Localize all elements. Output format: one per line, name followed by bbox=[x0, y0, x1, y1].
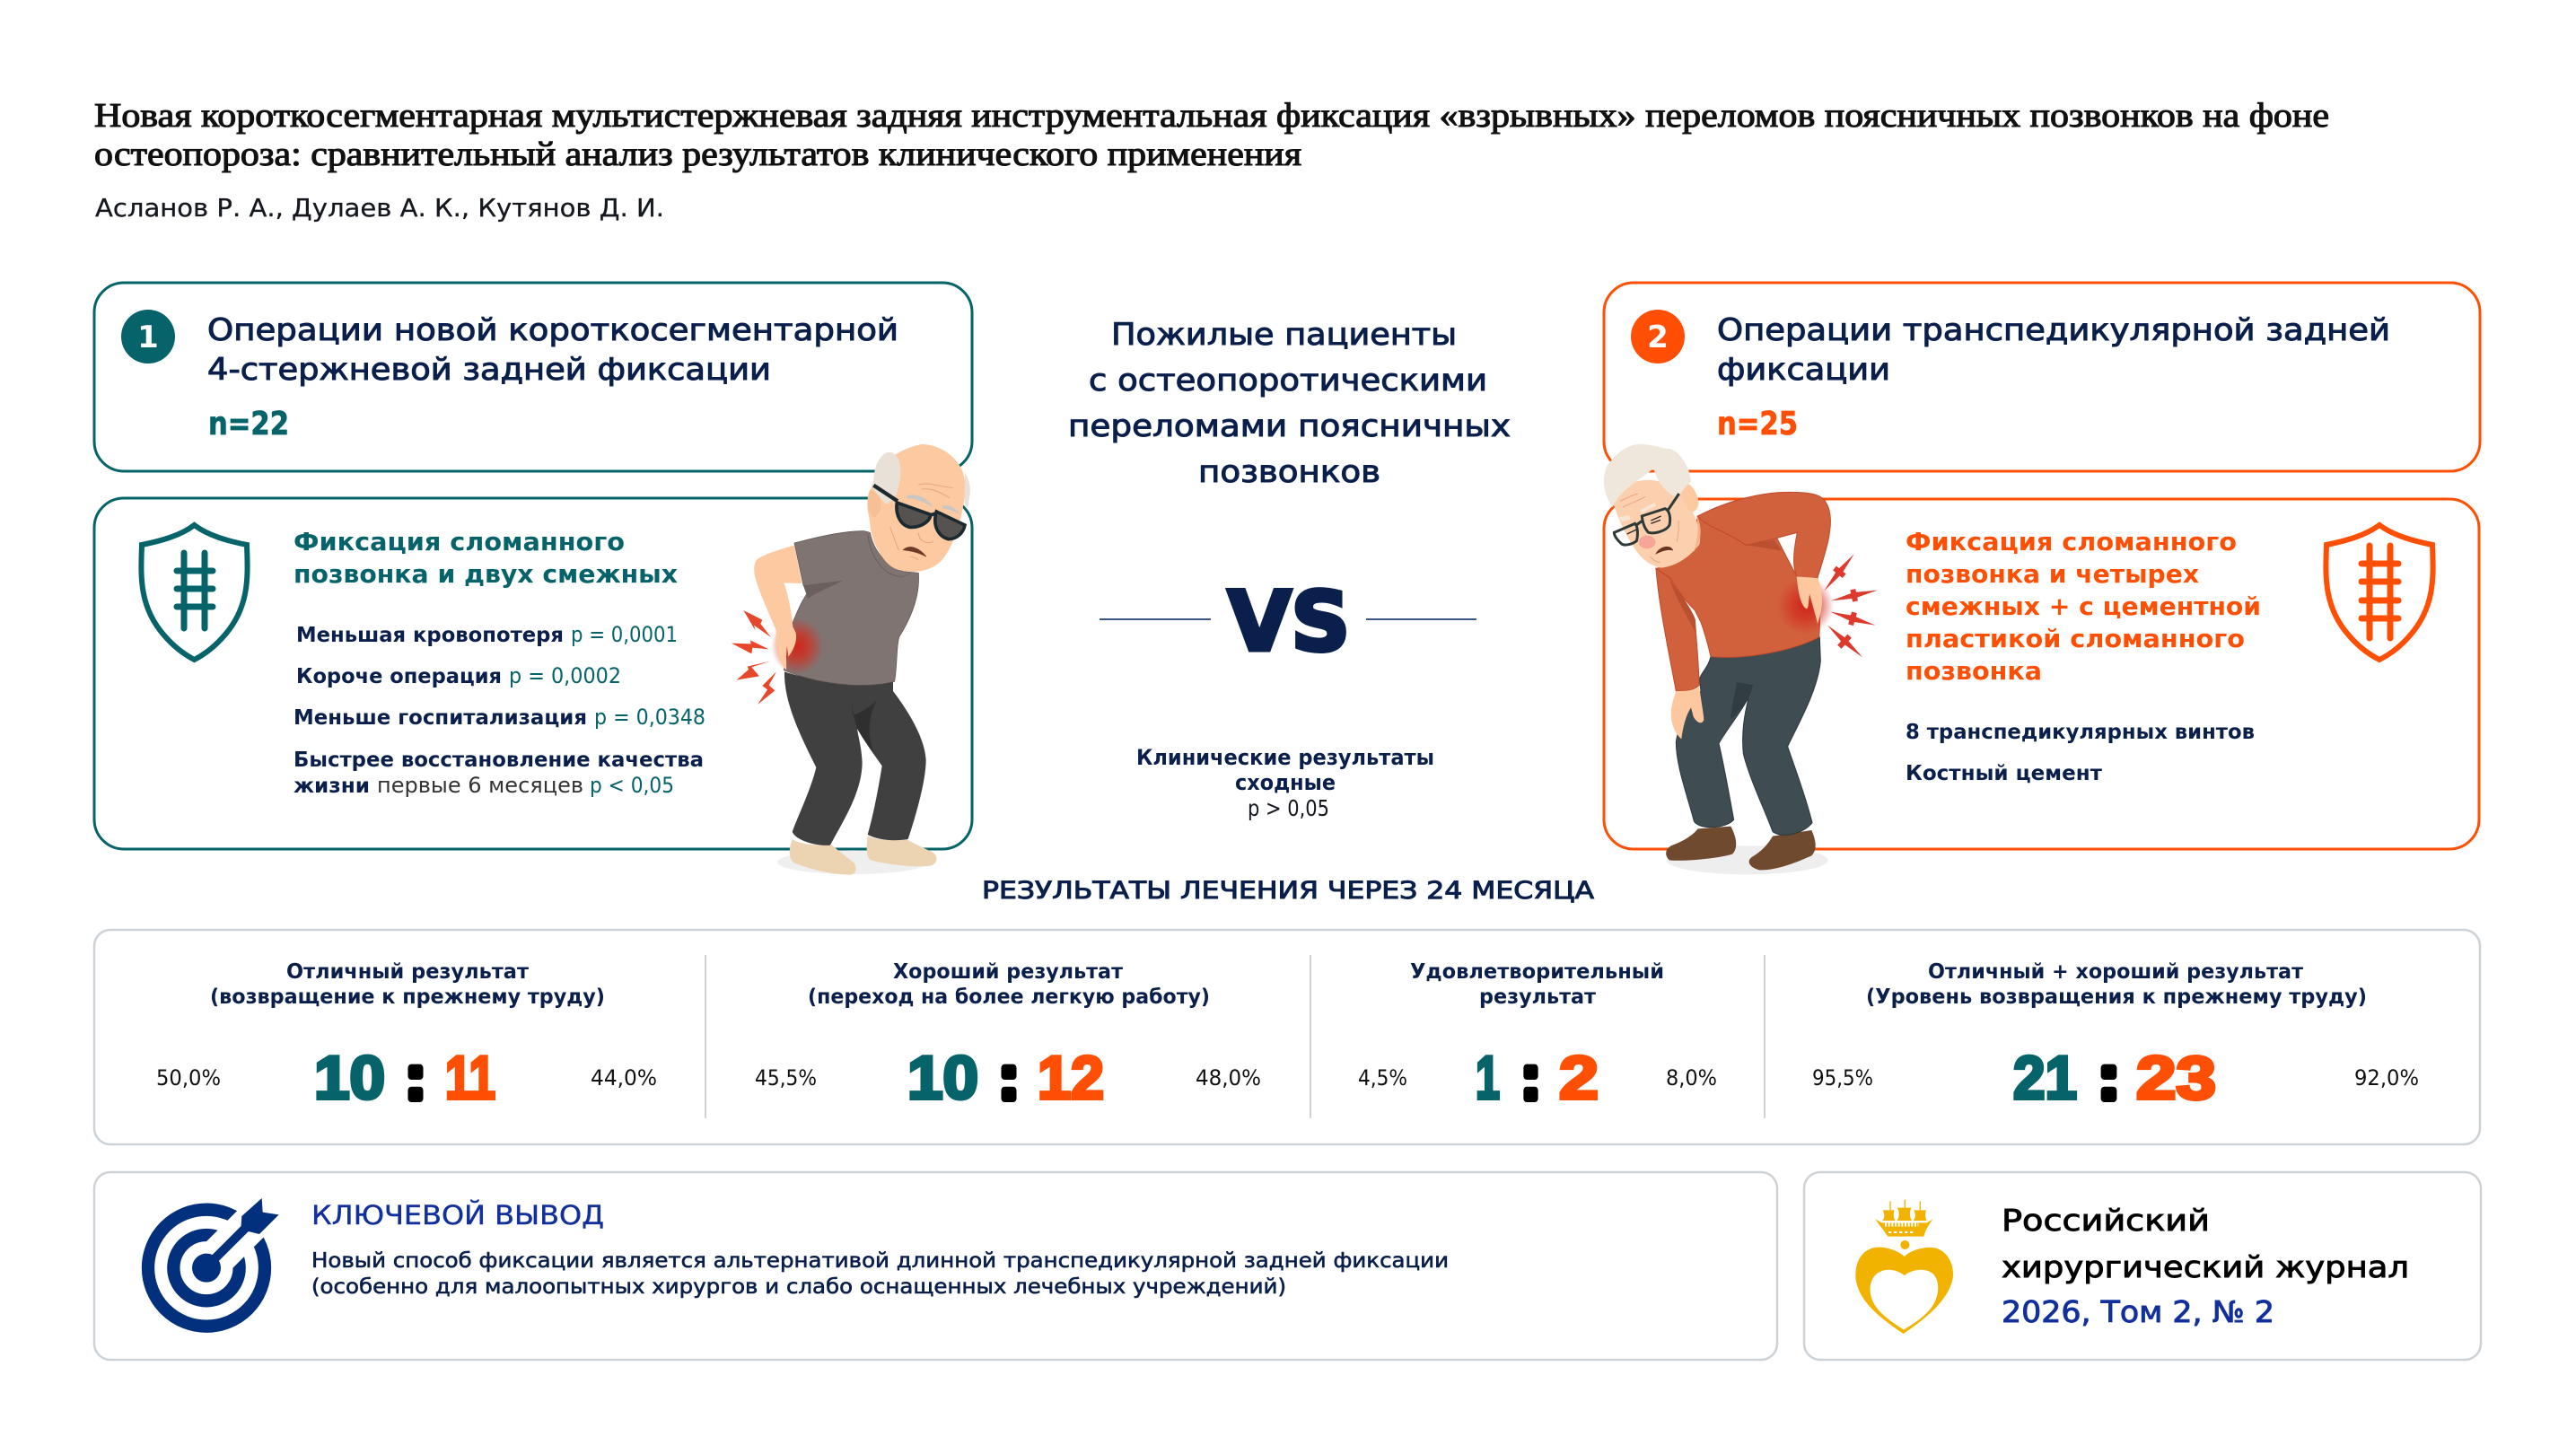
result: excellent plus good bbox=[1812, 960, 2419, 1112]
result: satisfactory: : bbox=[1521, 1044, 1540, 1112]
list: advantages: первые 6 месяцев bbox=[377, 773, 583, 798]
result: good: 48,0% bbox=[1196, 1065, 1261, 1090]
heading: group 1: 4-стержневой задней фиксации bbox=[207, 352, 771, 388]
text: conclusion: Новый способ фиксации является альтернативой длинной транспедикулярной задней фиксации bbox=[311, 1249, 1449, 1273]
logo: ship crown and golden heart bbox=[1855, 1200, 1953, 1334]
icon: teal shield with ladder bbox=[141, 525, 248, 660]
list: components: 8 транспедикулярных винтов bbox=[1906, 721, 2255, 744]
section heading: results: РЕЗУЛЬТАТЫ ЛЕЧЕНИЯ ЧЕРЕЗ 24 МЕСЯЦА bbox=[982, 877, 1595, 905]
result: good: 45,5% bbox=[755, 1065, 817, 1090]
heading: group 2 bbox=[1717, 312, 2390, 388]
result: excellent plus good: 95,5% bbox=[1812, 1065, 1873, 1090]
heading: fixation type 2: пластикой сломанного bbox=[1906, 624, 2245, 653]
result: satisfactory: 4,5% bbox=[1358, 1065, 1407, 1090]
result: satisfactory: 8,0% bbox=[1666, 1065, 1717, 1090]
center note: clinical results: сходные bbox=[1235, 770, 1336, 795]
result: good: 12 bbox=[1038, 1044, 1104, 1112]
result: excellent plus good: 23 bbox=[2136, 1044, 2216, 1112]
result: good: Хороший результат bbox=[893, 960, 1124, 984]
journal name and issue: 2026, Том 2, № 2 bbox=[2002, 1294, 2274, 1329]
sample size group 2: n=25 bbox=[1717, 406, 1798, 442]
panel: group 2 details bbox=[1604, 499, 2479, 849]
center block: patients: с остеопоротическими bbox=[1089, 363, 1487, 399]
journal name and issue bbox=[2002, 1203, 2409, 1329]
text: conclusion bbox=[311, 1249, 1449, 1299]
result: excellent: Отличный результат bbox=[286, 960, 530, 984]
icon: target with arrow bbox=[148, 1193, 281, 1327]
badge: number 2: 2 bbox=[1647, 320, 1669, 355]
center block: patients bbox=[1068, 317, 1511, 490]
heading: group 2: Операции транспедикулярной задней bbox=[1717, 312, 2390, 348]
badge: number 1: 1 bbox=[137, 320, 159, 355]
center block: patients: позвонков bbox=[1198, 454, 1380, 490]
heading: group 1: Операции новой короткосегментарной bbox=[207, 312, 898, 348]
journal name and issue: Российский bbox=[2002, 1203, 2210, 1238]
center block: patients: переломами поясничных bbox=[1068, 408, 1511, 444]
result: excellent plus good: Отличный + хороший результат bbox=[1928, 960, 2304, 984]
heading: fixation type 1: позвонка и двух смежных bbox=[294, 559, 678, 589]
heading: fixation type 2 bbox=[1906, 527, 2261, 686]
text: conclusion: (особенно для малоопытных хирургов и слабо оснащенных лечебных учреждений) bbox=[311, 1275, 1286, 1299]
journal name and issue: хирургический журнал bbox=[2002, 1249, 2409, 1284]
sample size group 1: n=22 bbox=[208, 406, 289, 442]
VS divider: VS bbox=[1228, 575, 1350, 670]
result: satisfactory: 1 bbox=[1476, 1044, 1500, 1112]
list: advantages bbox=[294, 622, 705, 798]
title: остеопороза: сравнительный анализ результатов клинического применения bbox=[94, 136, 1301, 173]
panel: key conclusion bbox=[94, 1172, 1777, 1360]
result: excellent: 44,0% bbox=[591, 1065, 657, 1090]
result: excellent: 10 bbox=[314, 1044, 385, 1112]
list: advantages: Меньшая кровопотеря bbox=[296, 624, 564, 647]
heading: fixation type 2: позвонка bbox=[1906, 656, 2042, 686]
result: excellent bbox=[156, 960, 657, 1112]
result: excellent plus good: : bbox=[2098, 1044, 2119, 1112]
heading: fixation type 2: позвонка и четырех bbox=[1906, 559, 2199, 589]
heading: key conclusion: КЛЮЧЕВОЙ ВЫВОД bbox=[311, 1200, 604, 1231]
list: components bbox=[1906, 721, 2255, 785]
icon: orange shield with ladder bbox=[2326, 525, 2433, 660]
result: excellent: : bbox=[406, 1044, 425, 1112]
list: advantages: Меньше госпитализация bbox=[294, 706, 587, 730]
title bbox=[94, 97, 2329, 173]
list: advantages: Быстрее восстановление качества bbox=[294, 749, 704, 772]
result: excellent: 50,0% bbox=[156, 1065, 221, 1090]
badge: number 1 bbox=[121, 310, 175, 364]
list: advantages: Короче операция bbox=[296, 665, 502, 688]
list: advantages: p = 0,0348 bbox=[594, 705, 705, 730]
center note: clinical results: Клинические результаты bbox=[1136, 745, 1434, 770]
result: excellent: 11 bbox=[445, 1044, 495, 1112]
illustration: elderly man with sunglasses and back pain bbox=[732, 444, 970, 875]
panel: treatment results bbox=[94, 930, 2480, 1144]
result: excellent plus good: 92,0% bbox=[2354, 1065, 2419, 1090]
heading: fixation type 1 bbox=[294, 527, 678, 589]
authors: Асланов Р. А., Дулаев А. К., Кутянов Д. И. bbox=[95, 193, 664, 223]
result: satisfactory: 2 bbox=[1559, 1044, 1599, 1112]
result: good bbox=[755, 960, 1261, 1112]
list: advantages: p = 0,0001 bbox=[571, 622, 678, 647]
result: excellent: (возвращение к прежнему труду) bbox=[210, 985, 605, 1009]
heading: fixation type 2: смежных + с цементной bbox=[1906, 591, 2261, 621]
panel: journal bbox=[1804, 1172, 2481, 1360]
center block: patients: Пожилые пациенты bbox=[1111, 317, 1457, 353]
center note: clinical results bbox=[1136, 745, 1434, 821]
result: satisfactory bbox=[1358, 960, 1717, 1112]
panel: group 1 header bbox=[94, 283, 972, 471]
heading: group 2: фиксации bbox=[1717, 352, 1890, 388]
panel: group 1 details bbox=[94, 498, 972, 849]
center note: clinical results: p > 0,05 bbox=[1248, 795, 1329, 821]
panel: group 2 header bbox=[1604, 283, 2480, 471]
result: satisfactory: Удовлетворительный bbox=[1410, 960, 1664, 984]
result: good: : bbox=[999, 1044, 1019, 1112]
heading: group 1 bbox=[207, 312, 898, 388]
list: advantages: p < 0,05 bbox=[590, 773, 674, 798]
badge: number 2 bbox=[1631, 310, 1685, 364]
list: components: Костный цемент bbox=[1906, 762, 2103, 785]
illustration: elderly man with glasses and back pain bbox=[1604, 444, 1878, 874]
result: excellent plus good: 21 bbox=[2013, 1044, 2077, 1112]
result: satisfactory: результат bbox=[1479, 985, 1597, 1009]
heading: fixation type 1: Фиксация сломанного bbox=[294, 527, 625, 556]
title: Новая короткосегментарная мультистержневая задняя инструментальная фиксация «взрывных» переломов поясничных позвонков на фоне bbox=[94, 97, 2329, 135]
list: advantages: p = 0,0002 bbox=[509, 663, 621, 688]
result: excellent plus good: (Уровень возвращения к прежнему труду) bbox=[1866, 985, 2367, 1009]
result: good: 10 bbox=[907, 1044, 978, 1112]
heading: fixation type 2: Фиксация сломанного bbox=[1906, 527, 2237, 556]
list: advantages: жизни bbox=[294, 775, 370, 798]
result: good: (переход на более легкую работу) bbox=[808, 985, 1210, 1009]
